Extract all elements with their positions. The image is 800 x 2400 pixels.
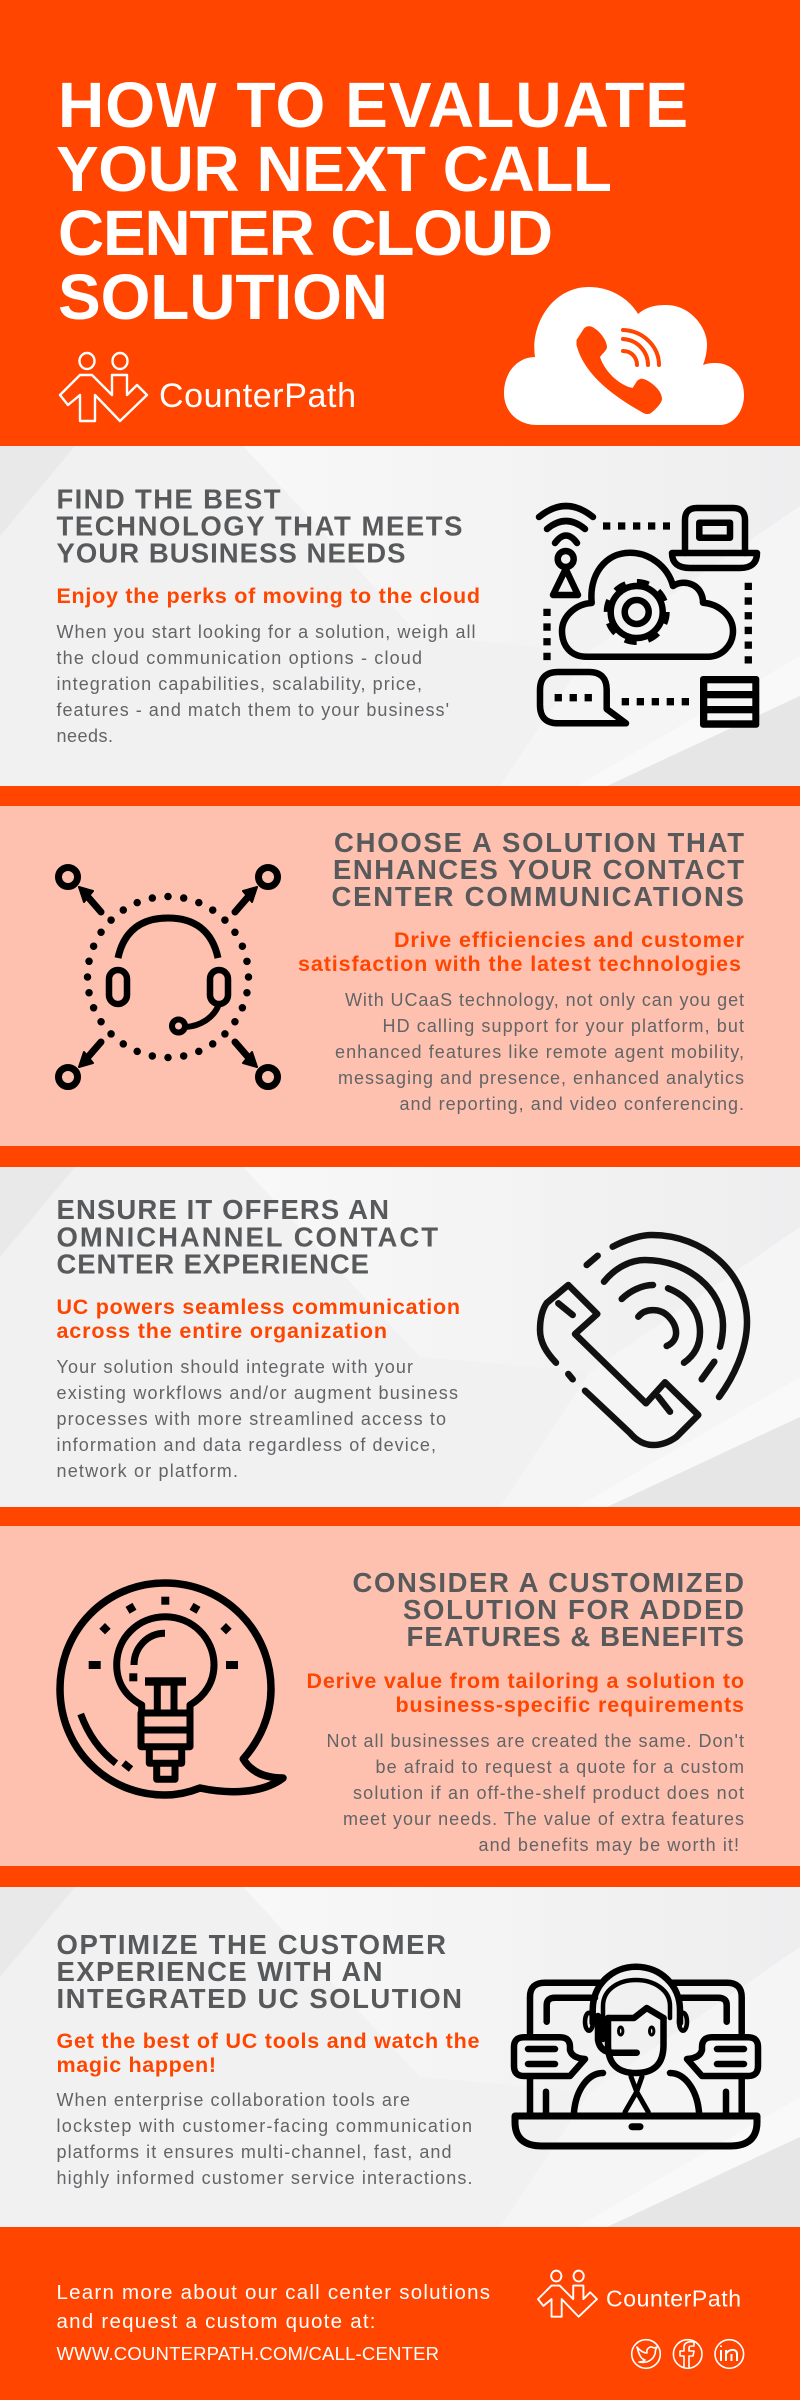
icon: agent on laptop xyxy=(514,1967,758,2146)
body text: and benefits may be worth it! xyxy=(478,1835,739,1855)
icon: headset with arrows xyxy=(58,868,278,1086)
body text: highly informed customer service interactions. xyxy=(56,2168,472,2188)
body text: enhanced features like remote agent mobility, xyxy=(335,1042,744,1062)
call to action text xyxy=(56,2281,490,2364)
body text: processes with more streamlined access to xyxy=(56,1409,446,1429)
subheading: UC powers seamless communication xyxy=(56,1295,460,1319)
panel: footer xyxy=(56,2271,744,2368)
body text xyxy=(56,1357,458,1481)
body text: messaging and presence, enhanced analytics xyxy=(338,1068,744,1088)
heading: CHOOSE A SOLUTION THAT xyxy=(334,827,744,858)
heading xyxy=(56,1194,438,1280)
title: HOW TO EVALUATE xyxy=(58,69,688,141)
heading xyxy=(352,1567,744,1652)
logo: CounterPath footer: CounterPath xyxy=(606,2286,741,2312)
body text: With UCaaS technology, not only can you get xyxy=(345,990,744,1010)
call to action text: WWW.COUNTERPATH.COM/CALL-CENTER xyxy=(56,2343,439,2364)
body text: meet your needs. The value of extra features xyxy=(343,1809,744,1829)
subheading: across the entire organization xyxy=(56,1319,387,1343)
heading: CENTER COMMUNICATIONS xyxy=(332,881,744,912)
title: SOLUTION xyxy=(58,261,388,333)
logo: CounterPath xyxy=(60,353,356,421)
panel: find the best technology xyxy=(0,446,800,786)
title: YOUR NEXT CALL xyxy=(56,133,612,205)
body text: information and data regardless of device, xyxy=(56,1435,436,1455)
subheading: magic happen! xyxy=(56,2053,216,2077)
heading: FIND THE BEST xyxy=(56,484,281,514)
body text: When you start looking for a solution, weigh all xyxy=(56,622,476,642)
body text: Your solution should integrate with your xyxy=(56,1357,413,1377)
title: CENTER CLOUD xyxy=(58,197,553,269)
subheading xyxy=(298,928,745,976)
icon: cloud network xyxy=(539,506,759,728)
body text xyxy=(56,622,476,746)
panel: choose a solution xyxy=(0,806,800,1146)
heading: ENHANCES YOUR CONTACT xyxy=(333,854,744,885)
subheading: Get the best of UC tools and watch the xyxy=(56,2029,480,2053)
title xyxy=(56,69,688,333)
subheading xyxy=(56,1295,460,1343)
body text xyxy=(335,990,744,1114)
subheading: business-specific requirements xyxy=(396,1693,744,1717)
body text: features - and match them to your business' xyxy=(56,700,449,720)
heading xyxy=(332,827,744,912)
heading: FEATURES & BENEFITS xyxy=(406,1621,744,1652)
body text xyxy=(56,2090,472,2188)
subheading: Derive value from tailoring a solution to xyxy=(306,1669,744,1693)
heading: YOUR BUSINESS NEEDS xyxy=(56,538,406,568)
heading: OMNICHANNEL CONTACT xyxy=(56,1222,438,1252)
icon: phone with signal arcs xyxy=(540,1235,747,1445)
body text: Not all businesses are created the same. Don't xyxy=(326,1731,744,1751)
body text: be afraid to request a quote for a custom xyxy=(376,1757,744,1777)
body text: platforms it ensures multi-channel, fast, and xyxy=(56,2142,452,2162)
body text: solution if an off-the-shelf product does not xyxy=(353,1783,744,1803)
icon: twitter xyxy=(632,2340,660,2368)
heading: INTEGRATED UC SOLUTION xyxy=(56,1983,462,2014)
body text: HD calling support for your platform, but xyxy=(382,1016,744,1036)
heading: SOLUTION FOR ADDED xyxy=(403,1594,744,1625)
logo: CounterPath: CounterPath xyxy=(159,377,356,415)
panel: customized solution xyxy=(0,1526,800,1866)
body text: lockstep with customer-facing communication xyxy=(56,2116,472,2136)
heading xyxy=(56,1929,462,2014)
heading: CONSIDER A CUSTOMIZED xyxy=(352,1567,744,1598)
heading: ENSURE IT OFFERS AN xyxy=(56,1194,389,1225)
heading: CENTER EXPERIENCE xyxy=(56,1248,369,1280)
subheading: satisfaction with the latest technologies xyxy=(298,952,741,976)
panel: header xyxy=(56,69,744,425)
body text: When enterprise collaboration tools are xyxy=(56,2090,410,2110)
icon: light bulb in speech bubble xyxy=(60,1583,283,1795)
subheading: Enjoy the perks of moving to the cloud xyxy=(56,584,480,608)
subheading: Drive efficiencies and customer xyxy=(394,928,745,952)
body text: and reporting, and video conferencing. xyxy=(400,1094,744,1114)
logo: CounterPath footer xyxy=(538,2271,741,2317)
call to action text: Learn more about our call center solutions xyxy=(56,2281,490,2304)
panel: omnichannel contact center xyxy=(0,1167,800,1507)
body text xyxy=(326,1731,744,1855)
icon: linkedin xyxy=(715,2340,744,2368)
body text: needs. xyxy=(56,726,113,746)
subheading xyxy=(306,1669,744,1717)
heading xyxy=(56,484,462,568)
subheading xyxy=(56,2029,480,2077)
heading: TECHNOLOGY THAT MEETS xyxy=(56,510,462,542)
heading: EXPERIENCE WITH AN xyxy=(56,1956,382,1987)
icon: cloud with phone xyxy=(504,287,744,425)
body text: integration capabilities, scalability, price, xyxy=(56,674,422,694)
icon: facebook xyxy=(673,2340,702,2368)
body text: existing workflows and/or augment business xyxy=(56,1383,458,1403)
panel: integrated UC solution xyxy=(0,1887,800,2227)
body text: the cloud communication options - cloud xyxy=(56,648,422,668)
call to action text: and request a custom quote at: xyxy=(56,2310,376,2333)
heading: OPTIMIZE THE CUSTOMER xyxy=(56,1929,446,1960)
body text: network or platform. xyxy=(56,1461,238,1481)
